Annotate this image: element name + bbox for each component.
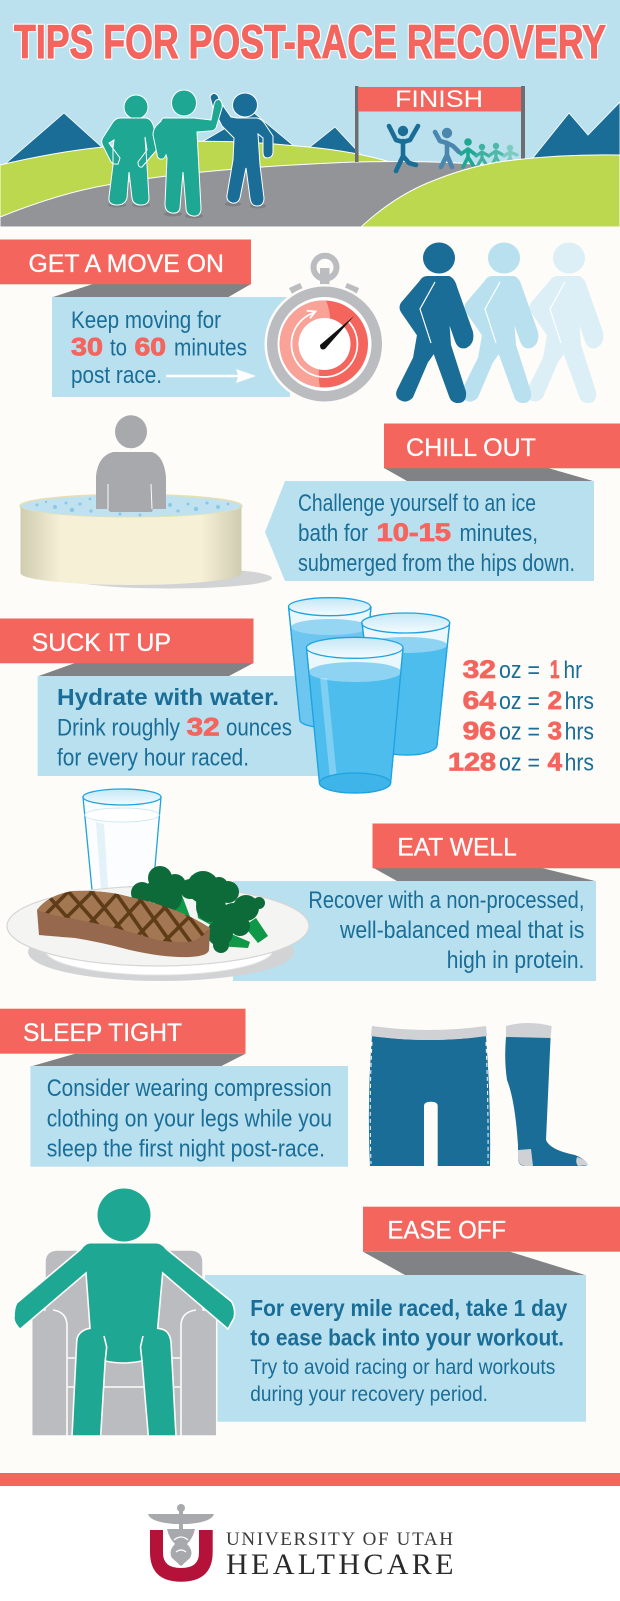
icon: compression sock — [505, 1023, 588, 1166]
icon: compression shorts — [369, 1026, 490, 1166]
section: chill out — [20, 415, 620, 588]
ribbon — [384, 424, 620, 481]
text panel — [205, 1275, 586, 1422]
conversion table: hrs — [565, 749, 594, 776]
text panel — [52, 297, 290, 397]
text panel: minutes, — [460, 520, 538, 547]
text panel: clothing on your legs while you — [47, 1106, 332, 1133]
ribbon — [372, 824, 620, 881]
conversion table: hrs — [565, 719, 594, 746]
text panel: post race. — [71, 362, 162, 389]
conversion table: 1 — [550, 656, 560, 684]
section: get a move on — [0, 240, 602, 404]
ribbon — [0, 1009, 246, 1066]
finish banner: FINISH — [395, 86, 483, 113]
conversion table: 3 — [548, 718, 562, 746]
conversion table: oz = — [499, 688, 540, 715]
ribbon: EASE OFF — [388, 1217, 506, 1245]
text panel — [265, 481, 594, 581]
text panel: ounces — [226, 715, 292, 742]
logo — [148, 1504, 454, 1582]
icon: ice bath — [20, 415, 272, 588]
section: ease off — [14, 1188, 620, 1436]
conversion table: oz = — [499, 749, 540, 776]
ribbon — [0, 240, 251, 297]
conversion table: 32 — [463, 656, 496, 684]
text panel: well-balanced meal that is — [339, 917, 584, 944]
conversion table: oz = — [499, 657, 540, 684]
ribbon: SUCK IT UP — [32, 629, 171, 657]
icon: seated person — [14, 1188, 235, 1436]
text panel: bath for — [298, 520, 368, 547]
text panel: for every hour raced. — [57, 745, 249, 772]
conversion table: hr — [564, 657, 582, 684]
text panel: 32 — [187, 714, 220, 742]
text panel: Keep moving for — [71, 307, 221, 334]
section: sleep tight — [0, 1009, 588, 1167]
text panel — [233, 881, 596, 981]
back right glass — [362, 613, 450, 755]
section: eat well — [7, 789, 620, 981]
logo: HEALTHCARE — [226, 1548, 454, 1581]
icon: walking figures — [397, 242, 602, 402]
blue person — [210, 93, 273, 206]
logo emblem — [148, 1504, 214, 1582]
front glass — [306, 637, 403, 793]
conversion table: 96 — [463, 718, 496, 746]
ribbon: GET A MOVE ON — [28, 250, 224, 278]
text panel: to — [110, 334, 127, 362]
foot shadows — [108, 202, 266, 218]
text panel: Try to avoid racing or hard workouts — [250, 1355, 555, 1379]
road — [0, 162, 495, 227]
icon: glasses of water — [288, 598, 450, 793]
footer background — [0, 1486, 620, 1601]
right hill — [360, 155, 620, 228]
ribbon — [0, 618, 254, 676]
back left glass — [288, 598, 371, 728]
runners — [389, 126, 517, 171]
icon: milk glass — [83, 789, 161, 890]
ribbon: EAT WELL — [397, 834, 517, 862]
text panel — [30, 1066, 348, 1167]
icon: steak — [37, 890, 210, 958]
text panel: 10-15 — [376, 519, 451, 547]
conversion table: 2 — [548, 687, 562, 715]
text panel: high in protein. — [447, 947, 584, 974]
logo text: UNIVERSITY OF UTAH — [226, 1529, 453, 1550]
left hill — [0, 141, 390, 220]
icon: plate — [7, 886, 309, 981]
text panel: Challenge yourself to an ice — [298, 490, 536, 517]
ribbon — [363, 1207, 620, 1275]
conversion table: 128 — [448, 748, 496, 776]
text panel: minutes — [174, 334, 247, 362]
conversion table — [448, 656, 594, 776]
conversion table: hrs — [565, 688, 594, 715]
text panel: Drink roughly — [57, 715, 180, 742]
icon: stopwatch — [264, 256, 384, 404]
text panel: Hydrate with water. — [57, 684, 279, 710]
ribbon: CHILL OUT — [406, 434, 536, 462]
footer band — [0, 1473, 620, 1486]
text panel: during your recovery period. — [250, 1382, 488, 1406]
finish banner — [355, 86, 525, 162]
icon: armchair — [32, 1250, 217, 1436]
left teal person — [102, 95, 158, 205]
mountains — [4, 102, 620, 170]
text panel: For every mile raced, take 1 day — [250, 1295, 567, 1321]
middle teal person — [153, 90, 222, 216]
conversion table: 4 — [548, 748, 562, 776]
conversion table: 64 — [463, 687, 496, 715]
text panel: 60 — [134, 334, 166, 362]
person in bath — [96, 415, 166, 512]
text panel: to ease back into your workout. — [250, 1325, 564, 1351]
conversion table: oz = — [499, 719, 540, 746]
text panel: sleep the first night post-race. — [47, 1136, 325, 1163]
ribbon: SLEEP TIGHT — [23, 1019, 182, 1047]
section: suck it up — [0, 598, 594, 793]
text panel: Consider wearing compression — [47, 1075, 332, 1102]
text panel: 30 — [71, 334, 103, 362]
icon: broccoli — [131, 866, 268, 953]
header scene — [0, 0, 620, 228]
text panel — [38, 676, 323, 776]
